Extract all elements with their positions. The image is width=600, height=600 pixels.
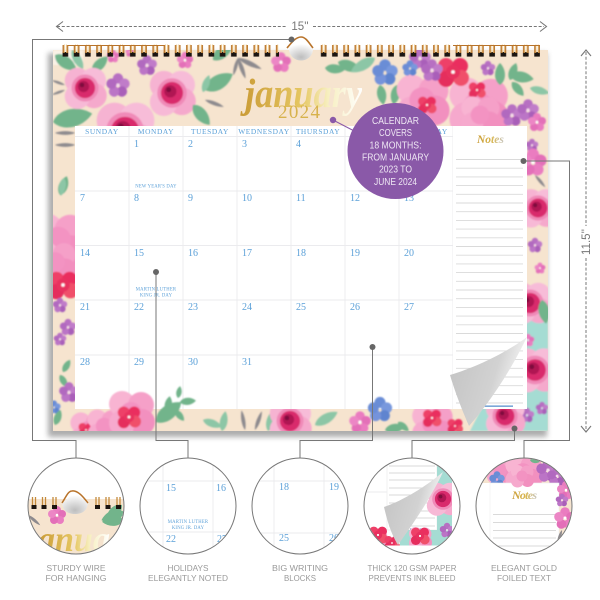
caption: sturdy wire: FOR HANGING [46,573,107,583]
holiday notes: MARTIN LUTHER [136,288,177,292]
date numbers: 14 [80,248,90,259]
detail circle: writing blocks: 25 [279,533,289,544]
date numbers: 15 [134,248,144,259]
callout: 18 months: COVERS [379,128,412,139]
weekday headers: SUNDAY [85,127,119,136]
weekday headers [85,127,448,136]
date numbers: 27 [404,302,414,313]
page curl [450,337,527,426]
leader line: foiled text [520,158,570,458]
holiday notes [135,184,177,298]
caption: thick paper: THICK 120 GSM PAPER [368,563,456,573]
date numbers [80,139,414,368]
ruled note lines [456,160,523,403]
date numbers: 17 [242,248,252,259]
wire coils [32,497,121,509]
date numbers: 11 [296,193,306,204]
detail circle: writing blocks: 26 [329,533,339,544]
flowers overlapping the grid [88,96,500,443]
date numbers: 3 [242,139,247,150]
white date grid [75,126,453,409]
notes column [453,126,527,409]
date numbers: 12 [350,193,360,204]
width label: 15'' [291,21,309,33]
width dimension arrow [56,21,546,33]
leader line: writing blocks [300,344,376,458]
grid lines [75,126,453,409]
weekday headers: FRIDAY [357,127,387,136]
detail circle: writing blocks: 18 [279,482,289,493]
caption: writing blocks: BLOCKS [284,573,316,583]
hole and hook [62,497,88,514]
date numbers: 8 [134,193,139,204]
date numbers: 5 [350,139,355,150]
callout: 18 months: CALENDAR [372,116,419,127]
detail circle: holidays: 16 [216,483,226,494]
date numbers: 28 [80,357,90,368]
calendar page [32,37,558,448]
callout: 18 months: JUNE 2024 [374,177,417,188]
gold lettering: anua [38,519,110,559]
gold notes heading: Notes [476,134,504,146]
date numbers: 9 [188,193,193,204]
date numbers: 23 [188,302,198,313]
detail circle: sturdy wire [27,458,126,559]
date numbers: 30 [188,357,198,368]
month title: 2024 [278,102,322,123]
gold notes text: Notes [511,488,537,502]
hanging hook and hole [287,37,313,60]
detail circle: holidays: 15 [166,483,176,494]
caption: sturdy wire [46,563,107,583]
date numbers: 24 [242,302,252,313]
page background [53,50,548,431]
date numbers: 21 [80,302,90,313]
date numbers: 2 [188,139,193,150]
caption: sturdy wire: STURDY WIRE [46,563,106,573]
date numbers: 4 [296,139,301,150]
holiday notes: NEW YEAR'S DAY [135,184,177,190]
caption: holidays: ELEGANTLY NOTED [148,573,228,583]
caption: foiled text [491,563,557,583]
leader line: sturdy wire [32,36,294,458]
callout: 18 months: 18 MONTHS: [370,140,422,152]
caption: foiled text: ELEGANT GOLD [491,563,557,573]
spiral wire binding [60,43,543,57]
date numbers: 29 [134,357,144,368]
weekday headers: THURSDAY [296,127,340,136]
weekday headers: SATURDAY [404,127,448,136]
callout: 18 months: 2023 TO [379,164,412,176]
date numbers: 10 [242,193,252,204]
detail circle: holidays: MARTIN LUTHER [168,520,209,525]
date numbers: 13 [404,193,414,204]
height dimension arrow [581,50,593,432]
detail circle: holidays [140,458,236,554]
detail circle: holidays: 22 [166,534,176,545]
date numbers: 1 [134,139,139,150]
leader line: thick paper [412,426,518,458]
date numbers: 19 [350,248,360,259]
detail circle: holidays: KING JR. DAY [172,526,205,531]
detail circle: writing blocks [250,458,350,554]
caption: foiled text: FOILED TEXT [497,573,552,583]
detail circle: writing blocks: 19 [329,482,339,493]
floral border [53,50,548,431]
date numbers: 18 [296,248,306,259]
calendar shadow [48,53,547,437]
detail circle: thick paper [360,458,464,558]
weekday headers: WEDNESDAY [238,127,290,136]
date numbers: 16 [188,248,198,259]
date numbers: 6 [404,139,409,150]
month title: january [240,70,363,116]
date numbers: 20 [404,248,414,259]
height label: 11.5'' [581,229,593,255]
date numbers: 25 [296,302,306,313]
callout: 18 months [330,103,444,199]
caption: writing blocks: BIG WRITING [272,563,328,573]
date numbers: 26 [350,302,360,313]
date numbers: 7 [80,193,85,204]
callout: 18 months: FROM JANUARY [362,152,429,164]
holiday notes: KING JR. DAY [140,294,173,298]
leader line: holidays [153,269,188,458]
caption: thick paper [368,563,456,583]
weekday headers: TUESDAY [191,127,229,136]
detail circle: foiled text [476,454,576,554]
weekday headers: MONDAY [138,127,174,136]
detail circle: holidays: 27 [217,534,227,545]
date numbers: 22 [134,302,144,313]
website footer [483,406,513,407]
caption: writing blocks [272,563,328,583]
caption: holidays: HOLIDAYS [168,563,209,573]
caption: thick paper: PREVENTS INK BLEED [368,573,456,583]
caption: holidays [148,563,228,583]
date numbers: 31 [242,357,252,368]
